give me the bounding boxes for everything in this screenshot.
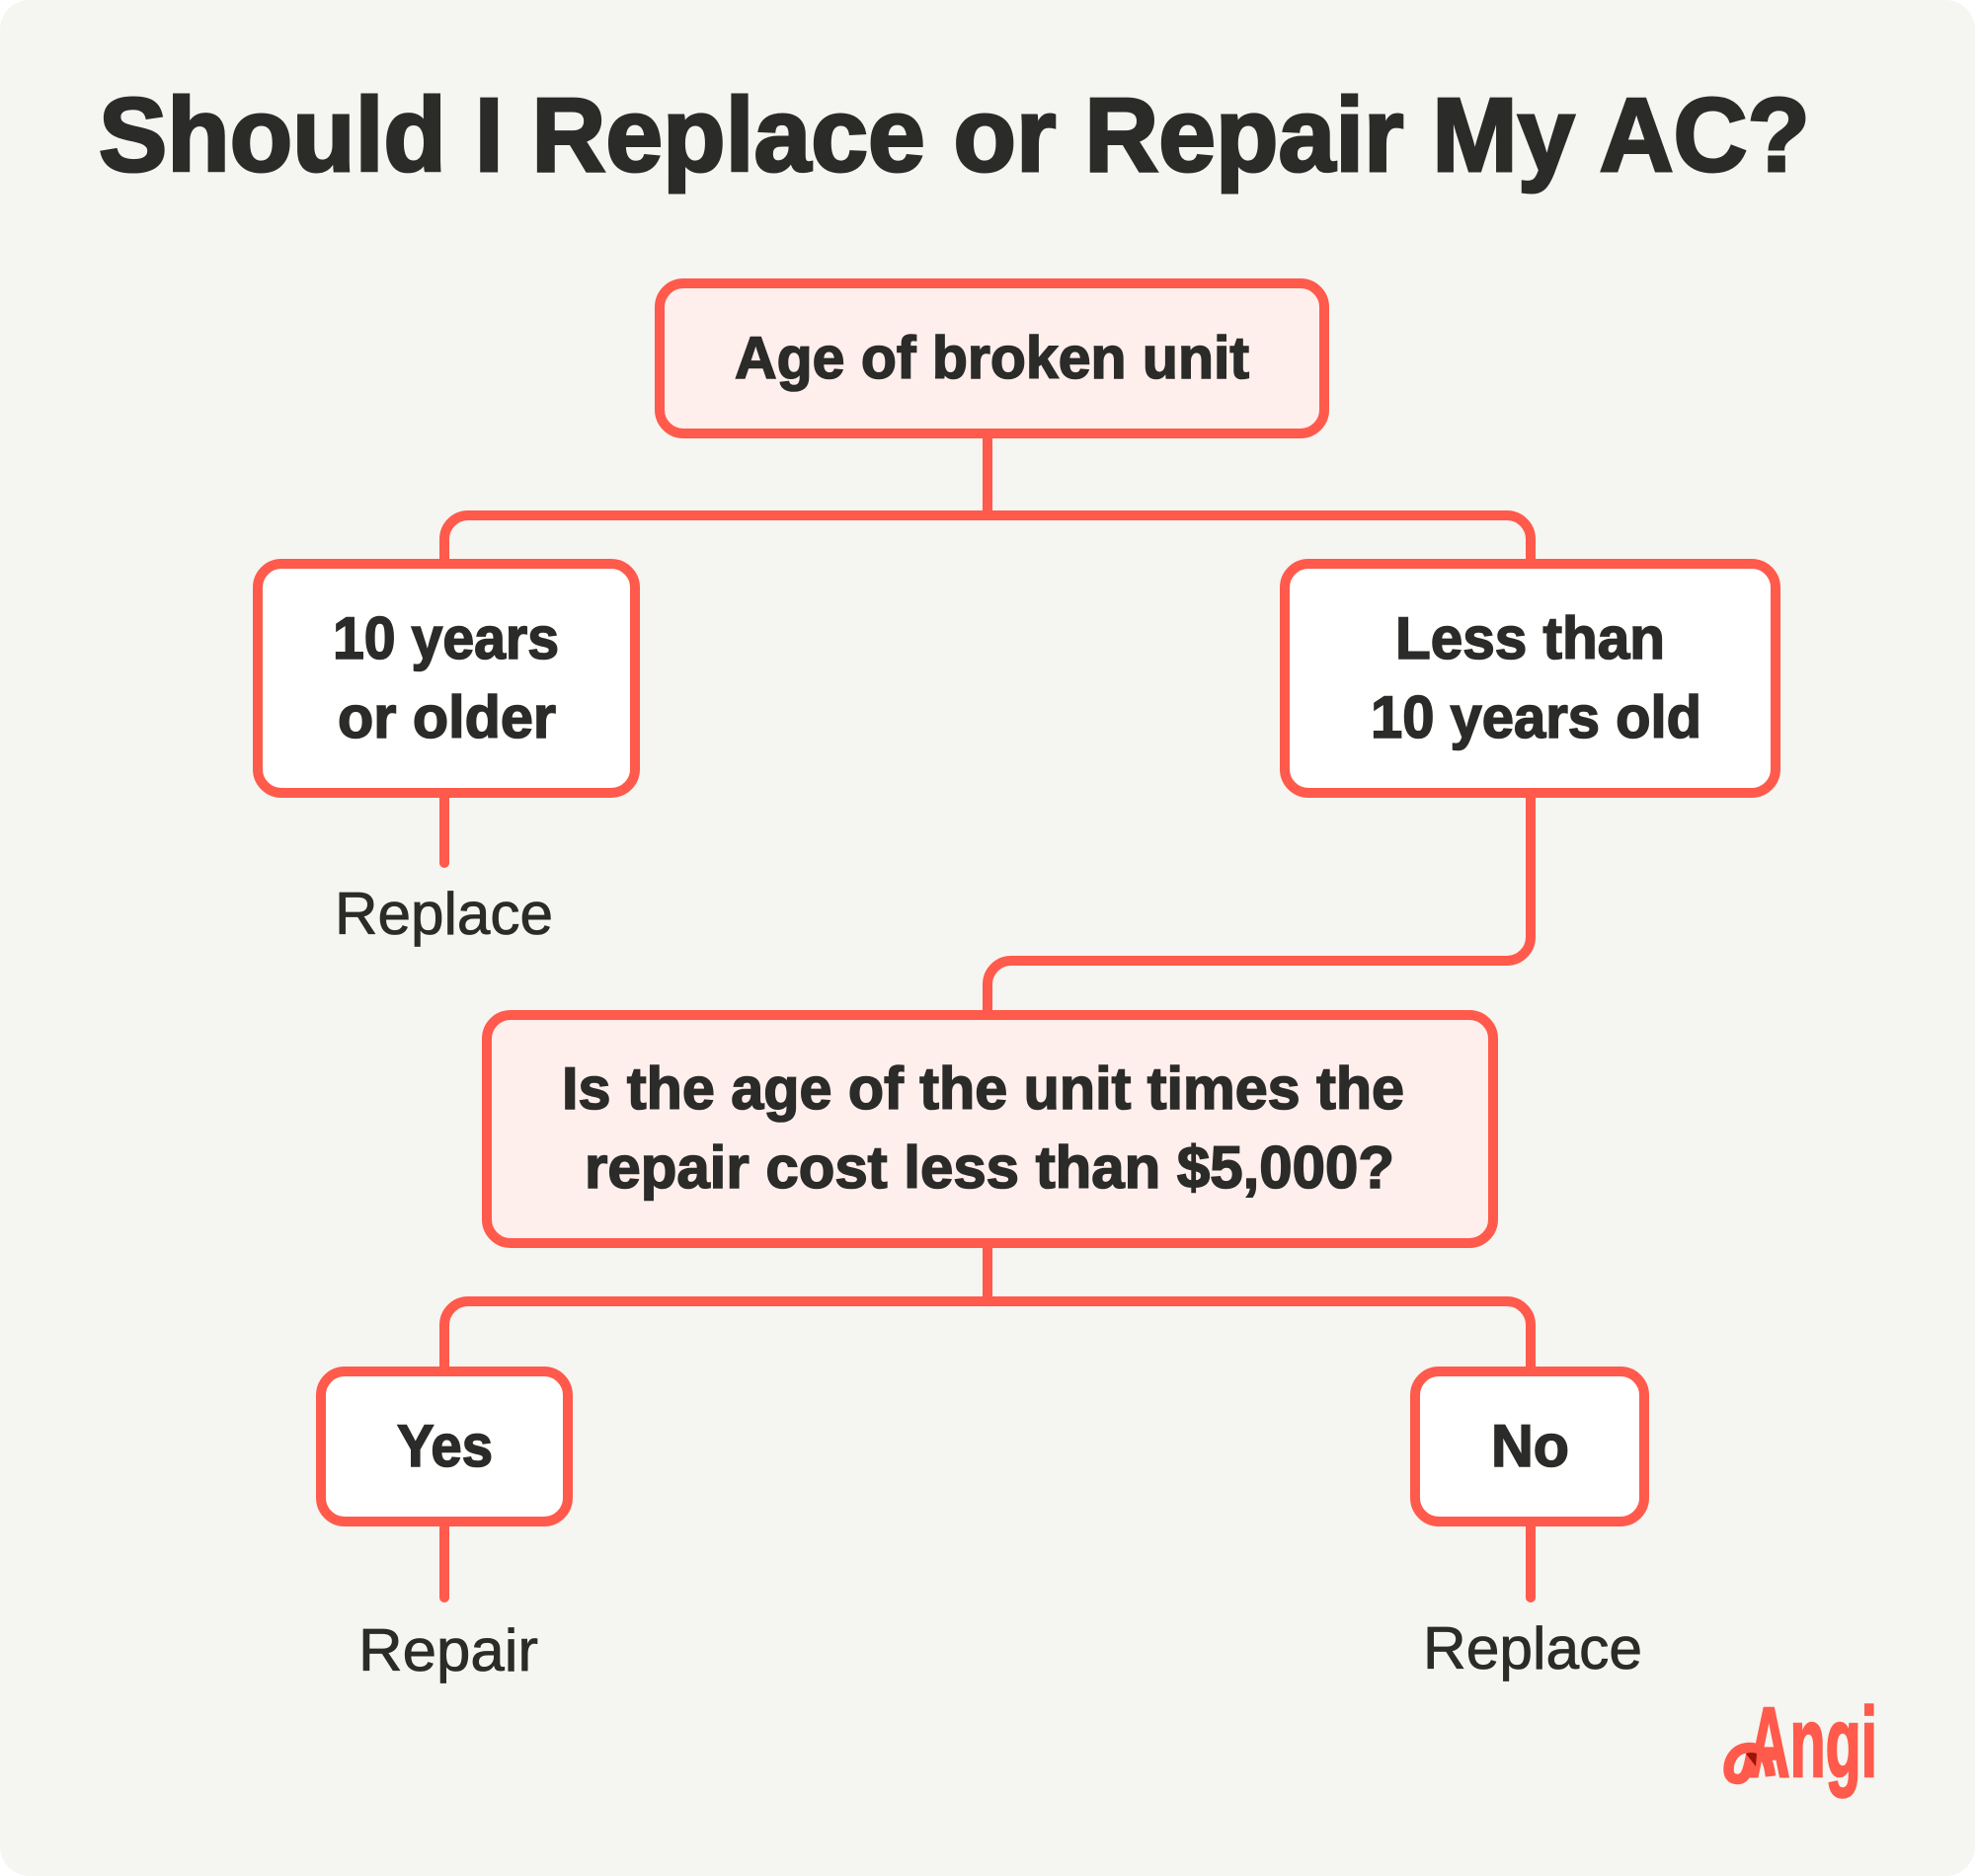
node: cost question: [487, 1015, 1493, 1243]
node: cost question: Is the age of the unit times the: [562, 1055, 1404, 1122]
connector: older to replace: [439, 798, 449, 863]
node: 10 years or older: 10 years: [333, 605, 559, 671]
connector: less than 10 to cost question: [988, 798, 1531, 1015]
node: less than 10 years old: [1285, 564, 1776, 793]
node: no: [1415, 1371, 1644, 1522]
node: 10 years or older: or older: [338, 684, 556, 750]
connector: age to branches: [444, 438, 1531, 563]
connector: question to yes and no: [444, 1248, 1531, 1371]
node: 10 years or older: [258, 564, 635, 793]
outcome: repair: Repair: [358, 1617, 538, 1683]
node: yes: Yes: [397, 1413, 493, 1479]
logo: Angi: Angi: [1748, 1687, 1877, 1798]
node: less than 10 years old: Less than: [1395, 605, 1665, 671]
title: Should I Replace or Repair My AC?: [99, 77, 1810, 194]
node: age of broken unit: [660, 283, 1324, 433]
node: less than 10 years old: 10 years old: [1371, 684, 1701, 750]
node: no: No: [1491, 1413, 1569, 1479]
node: cost question: repair cost less than $5,000?: [585, 1134, 1394, 1201]
connector: no to replace: [1526, 1526, 1536, 1598]
connector: yes to repair: [439, 1526, 449, 1598]
node: yes: [321, 1371, 568, 1522]
outcome: replace: Replace: [1423, 1615, 1642, 1681]
node: age of broken unit: Age of broken unit: [735, 325, 1249, 391]
logo: Angi: [1728, 1687, 1877, 1798]
outcome: replace: Replace: [335, 881, 553, 947]
